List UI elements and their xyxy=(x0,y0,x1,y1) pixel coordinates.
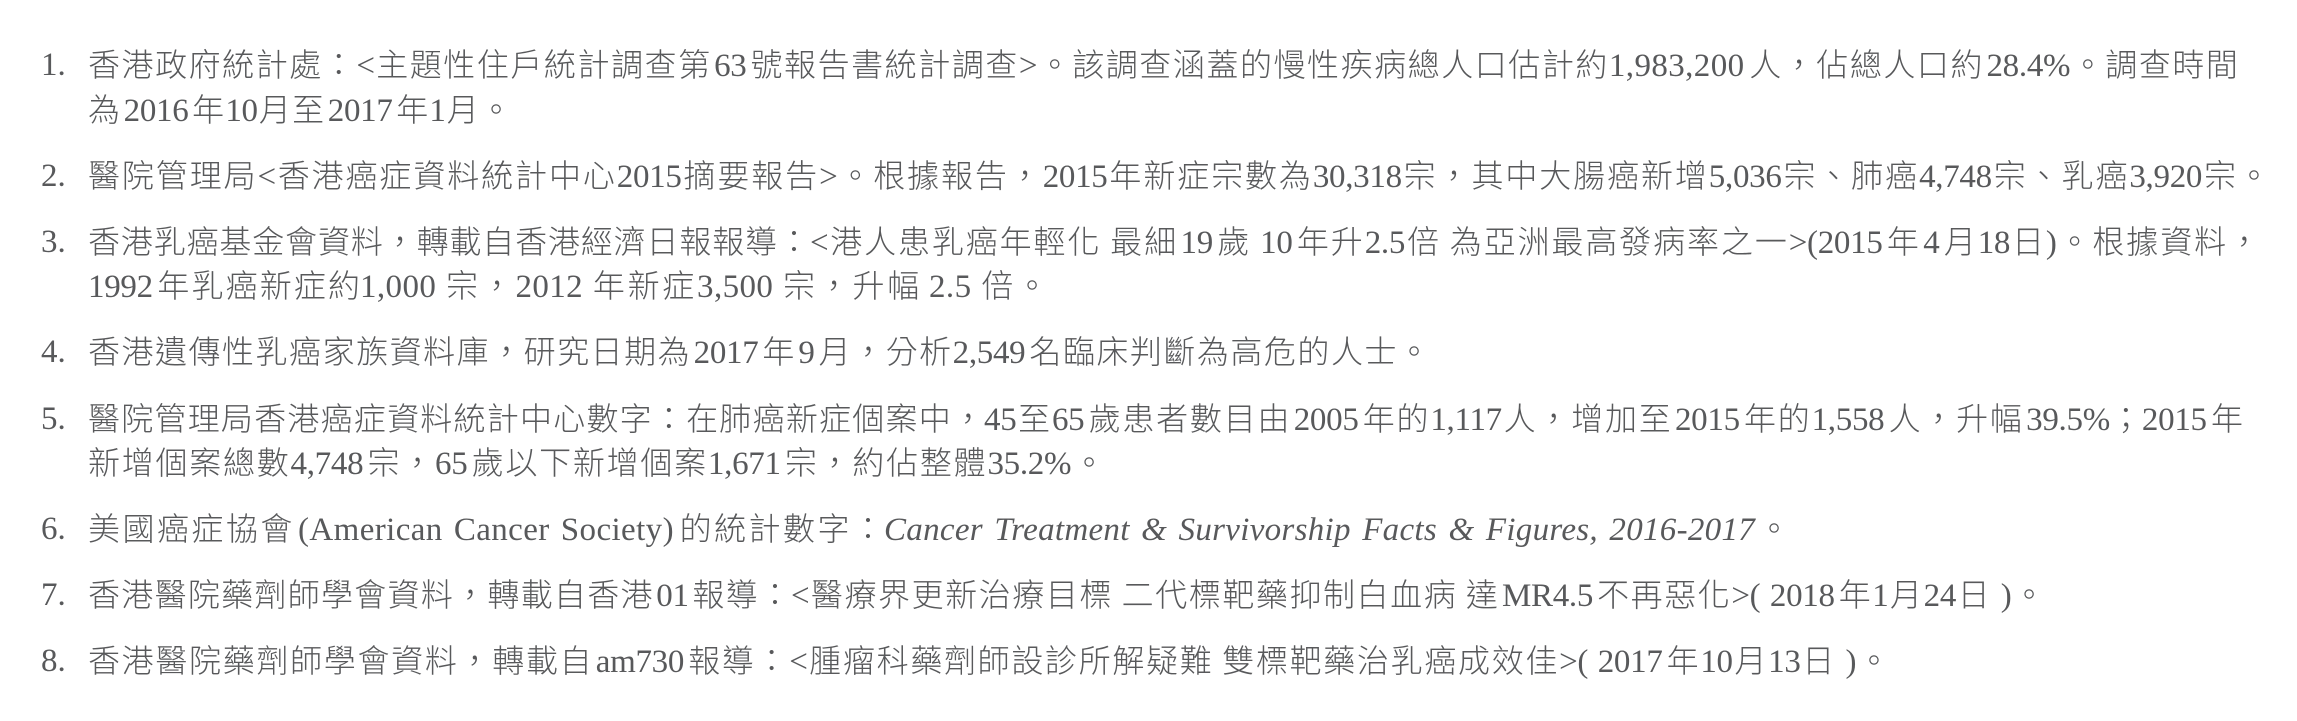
reference item 1: 為 2016 年10月至 2017 年1月。 xyxy=(88,85,512,131)
reference item 7: <醫療界更新治療目標 二代標靶藥抑制白血病 達 MR4.5 不再惡化>( 2018 年1月24日 )。 xyxy=(791,570,2045,616)
reference item 5: 5. xyxy=(41,401,66,437)
reference item 7 xyxy=(41,570,2045,616)
reference item 3: 1992 年乳癌新症約 xyxy=(88,261,360,307)
reference item 4: 香港遺傳性乳癌家族資料庫，研究日期為 2017 年 9 月，分析2,549 名臨床判斷為高危的人士。 xyxy=(88,327,1430,373)
reference item 1: 香港政府統計處：<主題性住戶統計調查第 63 號報告書統計調查>。該調查涵蓋的慢性疾病總人口估計約1,983,200 人，佔總人口約 28.4%。調查時間 xyxy=(88,40,2238,86)
reference item 6: Cancer Treatment & Survivorship Facts & Figures, 2016-2017。 xyxy=(884,504,1790,550)
reference item 3: 3. xyxy=(41,224,66,260)
reference item 3 xyxy=(41,217,2260,307)
reference item 6 xyxy=(41,504,1790,550)
reference item 2: 醫院管理局<香港癌症資料統計中心2015摘要報告>。根據報告，2015年新症宗數為30,318宗，其中大腸癌新增5,036宗、肺癌4,748宗、乳癌3,920宗。 xyxy=(88,151,2270,197)
reference item 6: 6. xyxy=(41,511,66,547)
reference item 7: 7. xyxy=(41,577,66,613)
reference item 5: 45至65 歲患者數目由 2005 年的1,117人，增加至 2015 年的1,558 人，升幅 39.5%；2015 年 xyxy=(984,394,2243,440)
reference item 3: 1,000 宗，2012 年新症3,500 宗，升幅 2.5 倍。 xyxy=(360,261,1048,307)
reference item 2: 2. xyxy=(41,158,66,194)
reference item 5: 新增個案總數4,748 宗，65 歲以下新增個案1,671 宗，約佔整體35.2%。 xyxy=(88,438,1105,484)
reference item 3: <港人患乳癌年輕化 最細 19 歲 10 年升2.5倍 為亞洲最高發病率之一>(2015 年 4 月18日)。根據資料， xyxy=(810,217,2260,263)
reference item 5: 醫院管理局香港癌症資料統計中心數字：在肺癌新症個案中， xyxy=(88,394,984,440)
reference item 7: 香港醫院藥劑師學會資料，轉載自香港 01 報導： xyxy=(88,570,791,616)
reference item 3: 香港乳癌基金會資料，轉載自香港經濟日報報導： xyxy=(88,217,810,263)
reference item 8: 香港醫院藥劑師學會資料，轉載自 am730 報導：<腫瘤科藥劑師設診所解疑難 雙標靶藥治乳癌成效佳>( 2017 年10月13日 )。 xyxy=(88,636,1890,682)
reference item 6: 美國癌症協會 (American Cancer Society) 的統計數字： xyxy=(88,504,884,550)
reference item 4: 4. xyxy=(41,334,66,370)
reference item 1: 1. xyxy=(41,47,66,83)
reference item 5 xyxy=(41,394,2243,484)
reference item 1 xyxy=(41,40,2238,131)
reference item 8: 8. xyxy=(41,643,66,679)
